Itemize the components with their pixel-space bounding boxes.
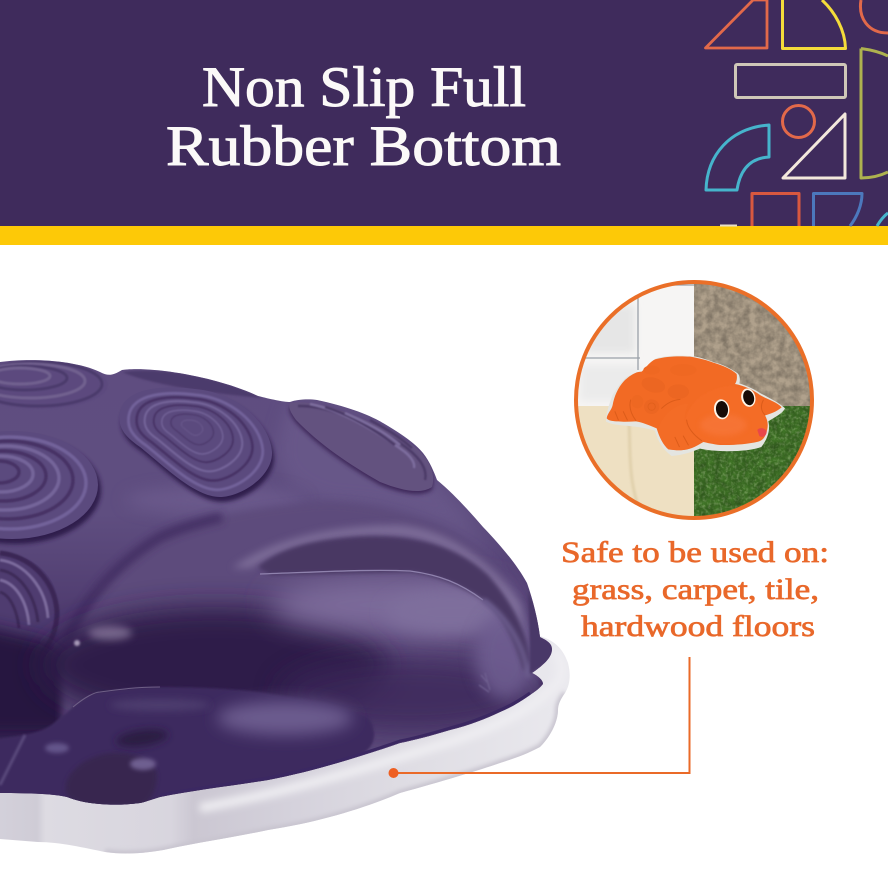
leg lit area (270, 577, 520, 633)
back spots (631, 364, 697, 414)
tile (575, 282, 694, 406)
frog product photo (0, 350, 575, 860)
wood (575, 406, 694, 524)
callout connector line (388, 657, 690, 778)
spot: top centre (122, 371, 262, 398)
rim lower edge shade (105, 693, 565, 853)
body centre light (147, 491, 286, 510)
yellow stripe (0, 226, 888, 245)
moulded mark (479, 673, 490, 692)
callout text: grass, carpet, tile, (572, 573, 819, 606)
inset circle: floor surfaces (575, 282, 813, 524)
leg mass (62, 502, 540, 780)
lower foot (0, 687, 374, 815)
back leg crease (630, 400, 765, 441)
leg dark core (40, 607, 390, 723)
purple frog body (0, 350, 560, 820)
title: Non Slip Full (202, 56, 526, 119)
callout text (561, 536, 829, 643)
toes (66, 753, 157, 806)
circle border (576, 282, 812, 518)
lower left spot rings (0, 553, 58, 657)
eyes (713, 398, 731, 420)
frog body (607, 356, 782, 450)
crease fold (258, 536, 530, 672)
title (166, 56, 561, 178)
geometric outline shapes (706, 0, 888, 226)
crease line (260, 570, 483, 600)
thigh edge light (483, 600, 528, 677)
white rubber rim (0, 630, 575, 860)
leg fold shadow (66, 517, 222, 640)
small orange frog (606, 356, 785, 456)
spot: left rings (0, 431, 101, 544)
band above crease (236, 523, 524, 623)
frog base (606, 356, 785, 456)
carpet (694, 282, 813, 406)
body right light side (284, 400, 460, 527)
tongue (757, 428, 767, 437)
flange (528, 590, 551, 674)
foot highlight (217, 701, 353, 735)
rim top face light (198, 721, 504, 814)
callout text: hardwood floors (581, 610, 815, 643)
header band (0, 0, 888, 227)
dark lip along rim (340, 692, 531, 762)
spot: top rear (0, 361, 108, 409)
dark left shadow (0, 621, 63, 737)
spot: centre rings (119, 387, 274, 502)
front leg (658, 403, 702, 450)
spot: right rings (289, 402, 433, 494)
title: Rubber Bottom (166, 115, 561, 178)
grass (694, 406, 813, 524)
callout text: Safe to be used on: (561, 536, 829, 569)
head (686, 386, 766, 444)
foot hollow (115, 726, 169, 750)
body highlight (88, 626, 132, 640)
